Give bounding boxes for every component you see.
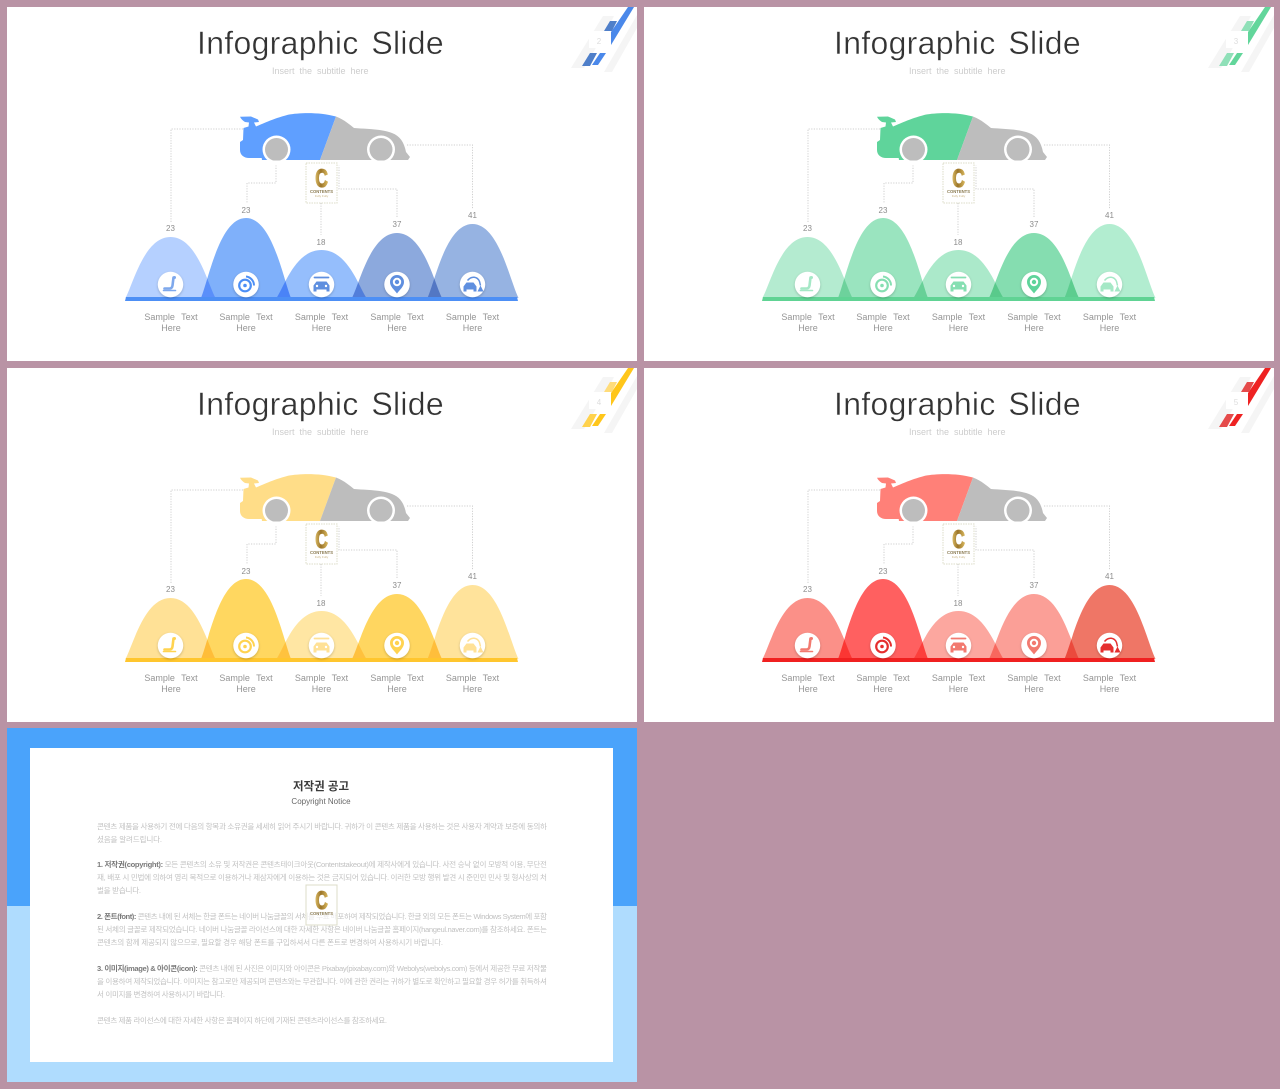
values: 41 [1105, 211, 1114, 220]
labels: Here [1024, 323, 1044, 333]
car silhouette [240, 474, 410, 526]
labels: Here [161, 684, 181, 694]
subtitle: Insert the subtitle here [909, 66, 1006, 76]
hill chart [762, 579, 1156, 662]
notice intro: 콘텐츠 제품을 사용하기 전에 다음의 항목과 소유권을 세세히 읽어 주시기 바랍니다. 귀하가 이 콘텐츠 제품을 사용하는 것은 사용자 계약과 보증에 동의하 [97, 821, 547, 831]
notice section 2: 2. 폰트(font): 콘텐츠 내에 된 서체는 한글 폰트는 네이버 나눔글꼴의 서체를 무료 배포하여 제작되었습니다. 한글 외의 모든 폰트는 Windows System에 포함 [97, 911, 547, 921]
labels: Sample Text [932, 673, 986, 683]
labels: Sample Text [370, 312, 424, 322]
logo: CONTENTS [947, 189, 970, 194]
labels: Here [463, 323, 482, 333]
corner decoration with page number: 2 [597, 37, 602, 46]
logo: Fully Fully [315, 194, 329, 198]
logo: Fully Fully [952, 194, 966, 198]
corner decoration with page number: 4 [597, 398, 602, 407]
notice subheading: Copyright Notice [291, 797, 351, 806]
logo: CONTENTS [310, 189, 333, 194]
logo [306, 524, 337, 564]
subtitle: Insert the subtitle here [272, 66, 369, 76]
logo [943, 524, 974, 564]
labels: Sample Text [219, 312, 273, 322]
corner decoration with page number [571, 7, 637, 72]
labels: Here [161, 323, 181, 333]
values: 37 [393, 581, 402, 590]
labels: Here [1024, 684, 1044, 694]
corner decoration with page number [1208, 368, 1274, 433]
logo [306, 163, 337, 203]
notice section 1: 벌을 받습니다. [97, 885, 141, 895]
labels: Sample Text [370, 673, 424, 683]
values [166, 206, 477, 247]
values: 41 [468, 572, 477, 581]
title: Infographic Slide [834, 386, 1081, 422]
notice section 3 [97, 963, 547, 999]
values: 18 [954, 238, 963, 247]
notice intro: 셨음을 알려드립니다. [97, 834, 162, 844]
labels [781, 312, 1137, 333]
labels: Sample Text [1083, 312, 1137, 322]
labels [781, 673, 1137, 694]
labels: Here [798, 684, 818, 694]
corner decoration with page number [1208, 7, 1274, 72]
labels: Here [387, 323, 407, 333]
title: Infographic Slide [197, 25, 444, 61]
notice section 2 [97, 911, 547, 947]
values [803, 567, 1114, 608]
labels: Sample Text [144, 312, 198, 322]
notice section 3: 서 이미지를 변경하여 사용하시기 바랍니다. [97, 989, 225, 999]
notice closing line: 콘텐츠 제품 라이선스에 대한 자세한 사항은 홈페이지 하단에 기재된 콘텐츠라이선스를 참조하세요. [97, 1015, 387, 1025]
corner decoration with page number [571, 368, 637, 433]
labels: Here [949, 684, 968, 694]
notice heading: 저작권 공고 [293, 779, 349, 793]
labels: Sample Text [295, 312, 349, 322]
logo: C [952, 525, 965, 554]
title: Infographic Slide [834, 25, 1081, 61]
logo: Fully Fully [952, 555, 966, 559]
car silhouette [877, 113, 1047, 166]
values: 23 [879, 567, 888, 576]
values: 37 [393, 220, 402, 229]
icons [795, 272, 1122, 297]
labels: Here [236, 684, 256, 694]
labels: Here [387, 684, 407, 694]
labels: Here [463, 684, 482, 694]
icons [795, 633, 1122, 658]
values: 37 [1030, 581, 1039, 590]
labels: Sample Text [446, 673, 500, 683]
values: 37 [1030, 220, 1039, 229]
labels: Here [798, 323, 818, 333]
values: 23 [242, 567, 251, 576]
notice section 2: 된 서체의 글꼴로 제작되었습니다. 네이버 나눔글꼴 라이선스에 대한 자세한 사항은 네이버 나눔글꼴 홈페이지(hangeul.naver.com)를 참조하세요. 폰트는 [97, 924, 547, 934]
values: 41 [468, 211, 477, 220]
notice intro [97, 821, 547, 844]
panel: blue infographic slide [7, 7, 637, 361]
notice section 3: 을 이용하여 제작되었습니다. 이미지는 참고로만 제공되며 콘텐츠와는 무관합니다. 이에 관한 권리는 귀하가 별도로 확인하고 필요할 경우 허가를 취득하셔 [97, 976, 547, 986]
logo overlay: C [315, 886, 328, 915]
logo: C [315, 164, 328, 193]
connector lines [808, 490, 1110, 596]
labels [144, 312, 500, 333]
notice section 1: 재, 배포 시 민법에 의하여 영리 목적으로 이용하거나 제삼자에게 이용하는 것은 금지되어 있습니다. 이러한 모방 행위 발견 시 준민민 민사 및 형사상의 처 [97, 872, 547, 882]
connector lines [808, 129, 1110, 235]
labels: Here [1100, 684, 1119, 694]
labels [144, 673, 500, 694]
car silhouette [240, 113, 410, 166]
labels: Sample Text [856, 312, 910, 322]
labels: Here [236, 323, 256, 333]
panel: yellow infographic slide [7, 368, 637, 722]
title: Infographic Slide [197, 386, 444, 422]
labels: Sample Text [1007, 673, 1061, 683]
values: 18 [317, 238, 326, 247]
logo overlay [306, 885, 337, 925]
icons [158, 633, 485, 658]
labels: Here [1100, 323, 1119, 333]
notice section 3: 3. 이미지(image) & 아이콘(icon): 콘텐츠 내에 된 사진은 이미지와 아이콘은 Pixabay(pixabay.com)와 Webolys(webolys.com) 등에서 제공한 무료 저작물 [97, 963, 547, 973]
labels: Sample Text [295, 673, 349, 683]
logo: C [315, 525, 328, 554]
labels: Here [873, 323, 893, 333]
panel: copyright notice slide [7, 728, 637, 1082]
hill chart [125, 218, 518, 301]
values: 23 [879, 206, 888, 215]
connector lines [171, 490, 472, 596]
values: 23 [803, 224, 812, 233]
labels: Here [312, 323, 331, 333]
logo: CONTENTS [947, 550, 970, 555]
values: 41 [1105, 572, 1114, 581]
corner decoration with page number: 5 [1234, 398, 1239, 407]
panel: green infographic slide [644, 7, 1274, 361]
notice section 2: 콘텐츠의 함께 제공되지 않으므로, 필요할 경우 해당 폰트를 구입하셔서 다른 폰트로 변경하여 사용하시기 바랍니다. [97, 937, 443, 947]
hill chart [125, 579, 518, 662]
labels: Sample Text [781, 673, 835, 683]
labels: Sample Text [446, 312, 500, 322]
car silhouette [877, 474, 1047, 526]
labels: Sample Text [219, 673, 273, 683]
labels: Sample Text [856, 673, 910, 683]
panel: red infographic slide [644, 368, 1274, 722]
icons [158, 272, 485, 297]
values: 18 [317, 599, 326, 608]
labels: Here [949, 323, 968, 333]
subtitle: Insert the subtitle here [909, 427, 1006, 437]
values: 23 [166, 585, 175, 594]
values: 23 [803, 585, 812, 594]
values [803, 206, 1114, 247]
logo [943, 163, 974, 203]
notice section 1 [97, 859, 547, 895]
logo: Fully Fully [315, 555, 329, 559]
labels: Sample Text [932, 312, 986, 322]
labels: Sample Text [1007, 312, 1061, 322]
corner decoration with page number: 3 [1234, 37, 1239, 46]
hill chart [762, 218, 1156, 301]
connector lines [171, 129, 472, 235]
values: 23 [166, 224, 175, 233]
logo overlay: CONTENTS [310, 911, 333, 916]
labels: Sample Text [781, 312, 835, 322]
labels: Sample Text [1083, 673, 1137, 683]
values [166, 567, 477, 608]
subtitle: Insert the subtitle here [272, 427, 369, 437]
values: 23 [242, 206, 251, 215]
labels: Sample Text [144, 673, 198, 683]
logo: CONTENTS [310, 550, 333, 555]
notice section 1: 1. 저작권(copyright): 모든 콘텐츠의 소유 및 저작권은 콘텐츠테이크아웃(Contentstakeout)에 제작사에게 있습니다. 사전 승낙 없이 모방적 이용, 무단전 [97, 859, 547, 869]
labels: Here [312, 684, 331, 694]
labels: Here [873, 684, 893, 694]
logo: C [952, 164, 965, 193]
values: 18 [954, 599, 963, 608]
